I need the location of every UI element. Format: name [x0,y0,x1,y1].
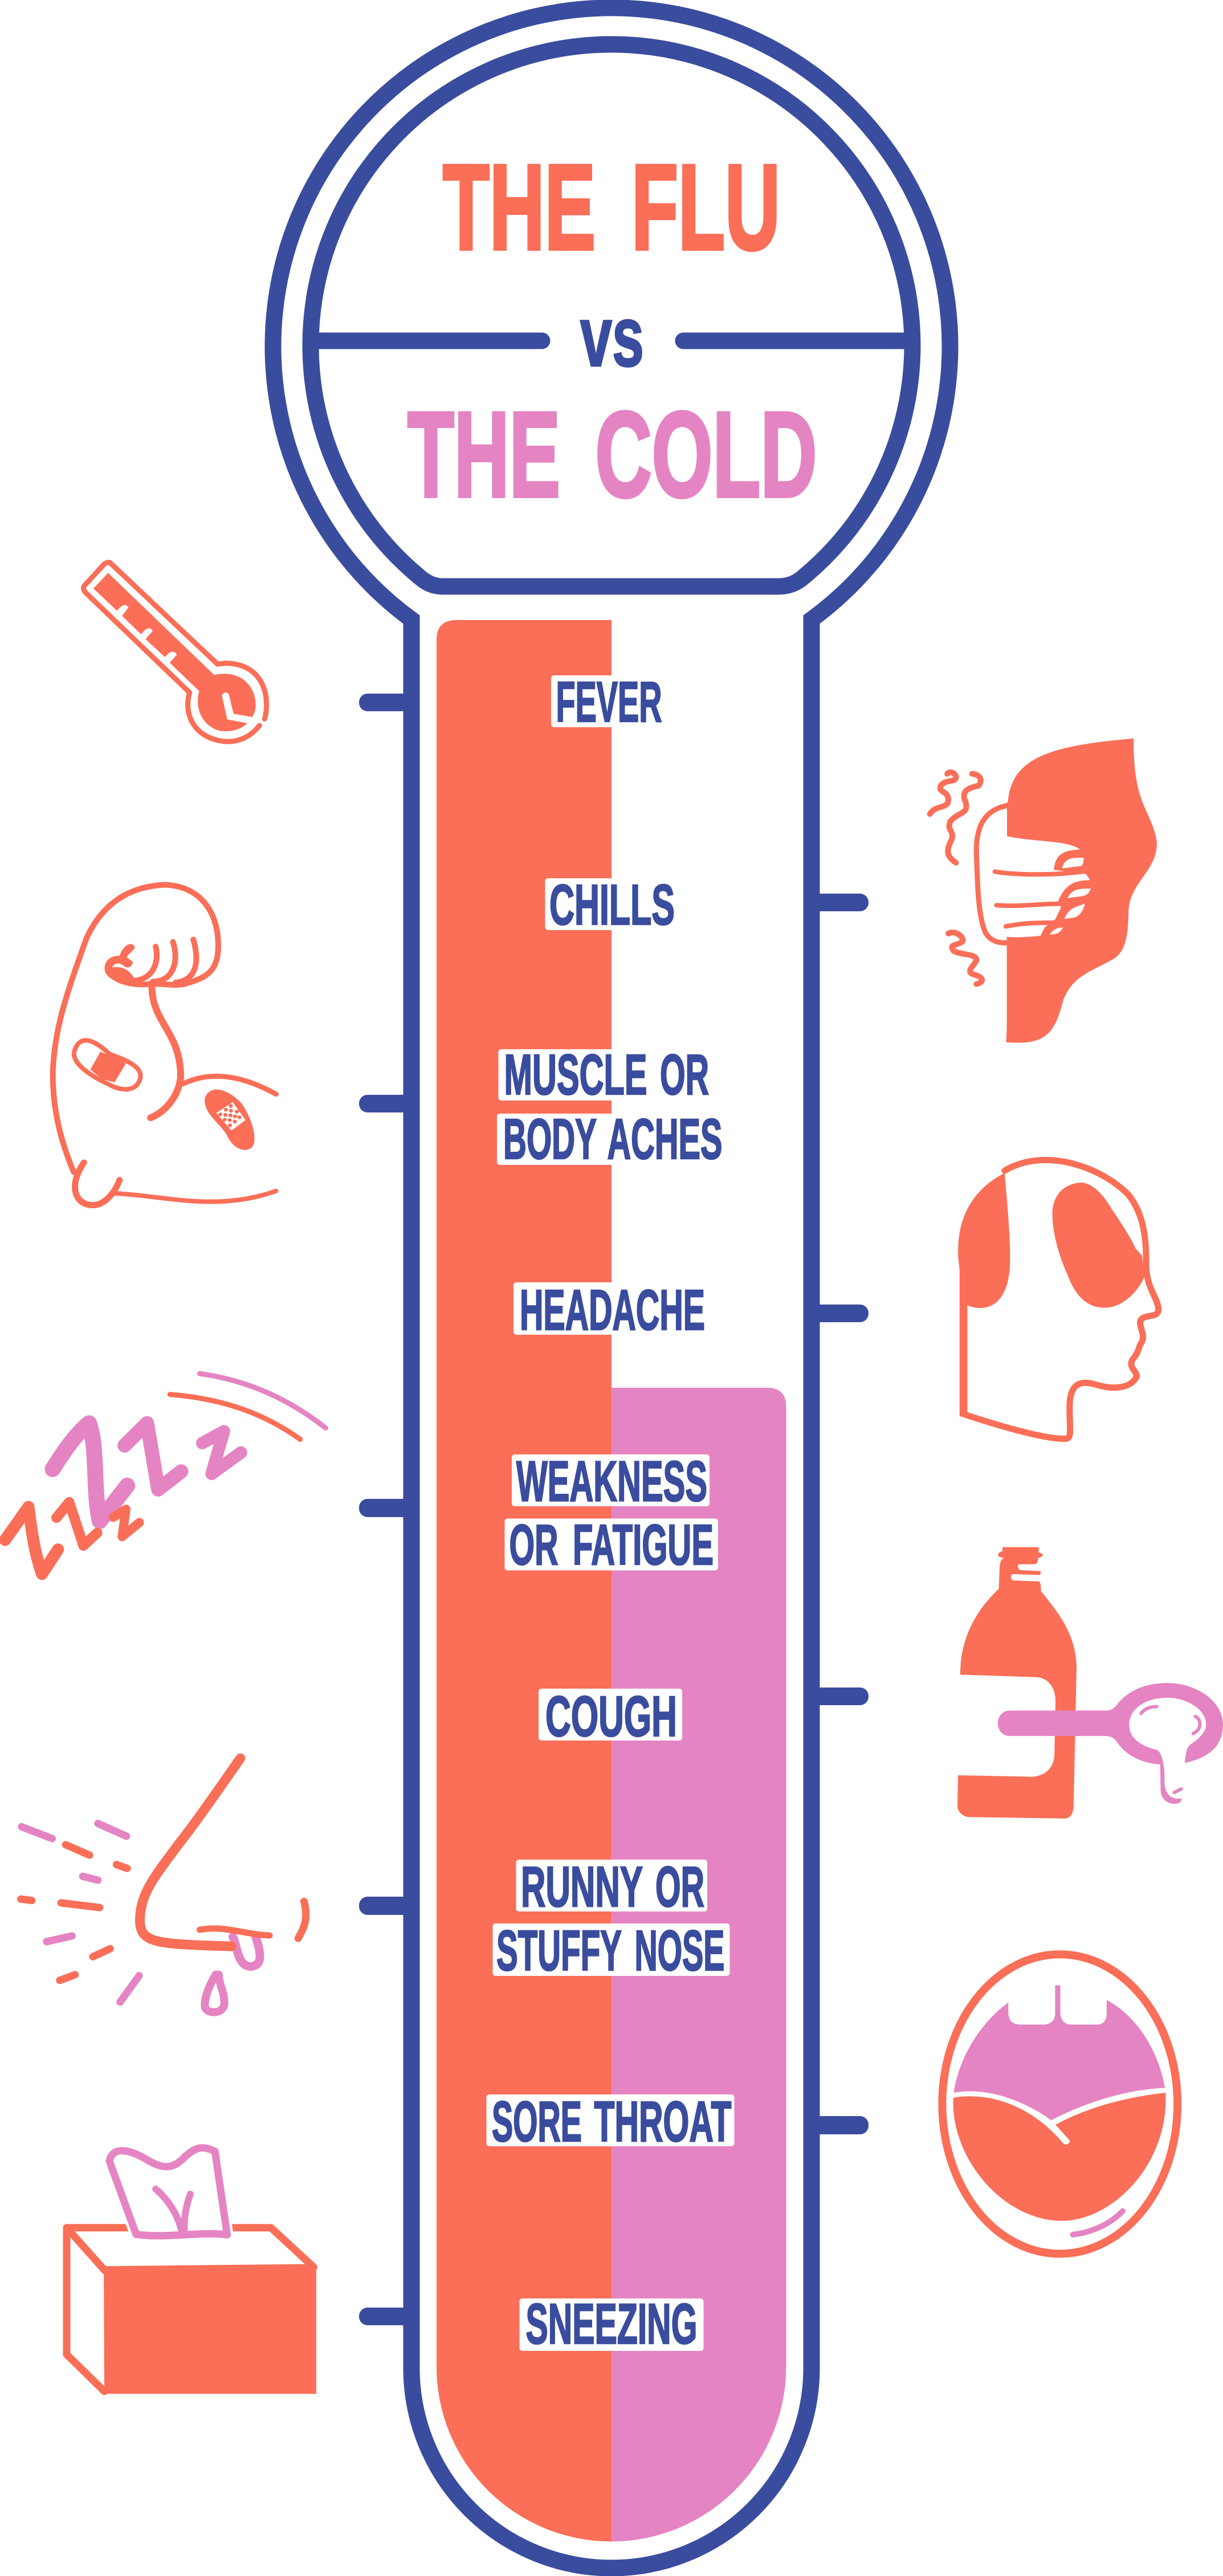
cold level fill [611,1388,786,2542]
symptom label: cough: COUGH [545,1685,677,1748]
icon: headache profile [958,1160,1159,1438]
symptom label: cough [539,1685,682,1748]
symptom label: chills: CHILLS [549,873,675,937]
icon: sore throat open mouth [942,1954,1177,2254]
symptom label: fever [551,670,672,734]
symptom label: sore throat: THROAT [594,2090,732,2154]
symptom label: weakness: WEAKNESS [516,1450,707,1514]
right tick marks [809,894,869,2134]
symptom label: muscle or: OR [660,1043,709,1107]
icon: sleeping zzz [5,1373,325,1574]
icon: tissue box [67,2148,316,2394]
icon: runny nose [21,1758,306,2012]
symptom label: fever: FEVER [556,670,662,734]
icon: thermometer [84,563,267,741]
divider with gap for vs [315,333,908,349]
symptom label: or fatigue: OR [509,1513,558,1577]
symptom label: body aches: ACHES [608,1107,723,1171]
symptom label: runny or: OR [655,1855,704,1919]
flu level fill [437,620,612,2542]
symptom label: stuffy nose: STUFFY [496,1919,622,1983]
symptom label: runny or: RUNNY [521,1855,643,1919]
symptom label: headache [513,1278,710,1342]
symptom label: or fatigue [505,1513,718,1577]
left tick marks [359,694,416,2325]
thermometer head inner outline [311,44,912,586]
thermometer outer outline [273,8,950,2568]
symptom label: sneezing: SNEEZING [525,2292,698,2356]
title: vs: vs [580,288,644,384]
symptom label: sore throat [487,2090,734,2154]
symptom label: weakness [512,1450,710,1514]
symptom label: or fatigue: FATIGUE [573,1513,714,1577]
icon: chills, hand on head [930,739,1157,1043]
title: the cold [407,387,817,523]
symptom label: sneezing [520,2292,703,2356]
symptom label: muscle or: MUSCLE [504,1043,647,1107]
symptom label: sore throat: SORE [492,2090,582,2154]
title: the cold: COLD [595,387,817,523]
icon: flexed arm with bandages [53,885,276,1205]
title: the flu: THE [443,140,596,275]
symptom label: body aches: BODY [503,1107,597,1171]
symptom label: headache: HEADACHE [520,1278,705,1342]
symptom label: stuffy nose: NOSE [635,1919,725,1983]
title: the flu: FLU [631,140,780,275]
symptom label: chills [545,873,679,937]
title: the cold: THE [407,387,560,523]
icon: cough syrup bottle and spoon [957,1547,1223,1819]
